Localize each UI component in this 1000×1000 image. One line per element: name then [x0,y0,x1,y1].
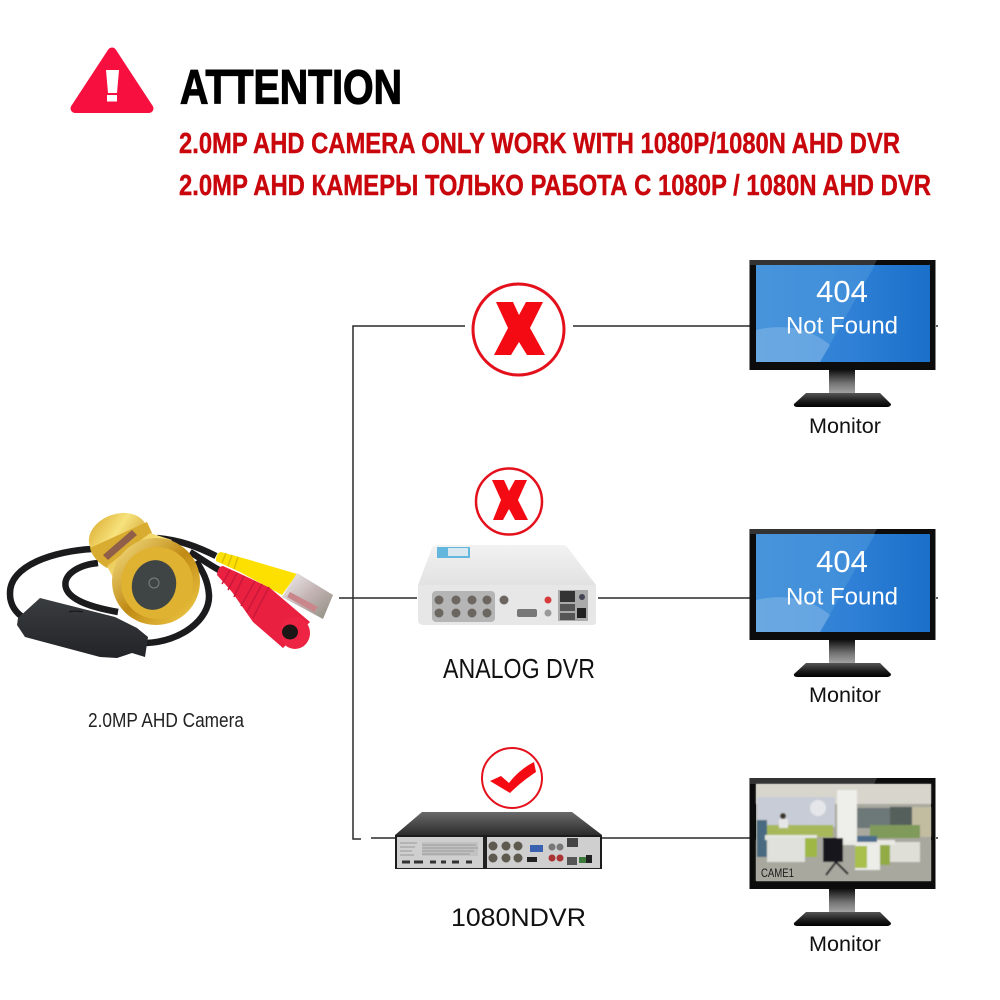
monitor bottom label: Monitor [809,932,881,956]
camera overlay text: CAME1 [761,866,794,880]
analog dvr [418,545,596,625]
monitor middle label: Monitor [809,683,881,707]
monitor middle [750,529,936,677]
camera gold barrel [82,505,172,595]
icon: red cross middle [476,468,542,534]
camera label: 2.0MP AHD Camera [88,709,244,732]
connection wires [339,326,938,839]
office photo [756,784,931,881]
screen text: 404 [816,544,868,579]
icon: red check [482,748,542,808]
monitor bottom with office feed [750,778,936,926]
title: ATTENTION [180,60,402,114]
screen text [786,544,898,610]
camera silver connector [282,573,333,619]
monitor top label: Monitor [809,414,881,438]
monitor top [750,260,936,407]
camera cables [10,538,219,643]
icon: red cross top [473,284,564,375]
camera red plug [217,566,310,649]
screen text [786,274,898,340]
screen text: Not Found [786,584,898,610]
1080n dvr [395,812,602,869]
1080n dvr label: 1080NDVR [451,904,586,932]
icon: warning triangle [75,52,149,108]
camera lens [112,538,200,625]
camera yellow plug [216,552,297,595]
screen text: Not Found [786,312,898,340]
camera control box [17,598,148,658]
screen text: 404 [816,274,868,309]
camera photo [10,505,333,658]
analog dvr label: ANALOG DVR [443,653,595,684]
